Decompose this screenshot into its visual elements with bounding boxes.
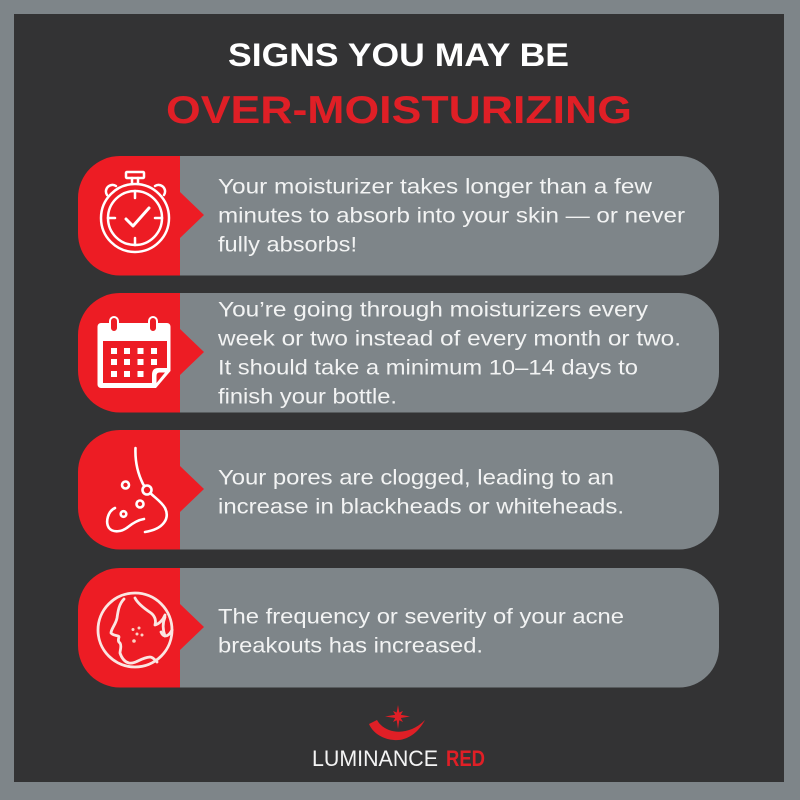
icon: face with acne (98, 593, 172, 667)
title (166, 37, 632, 132)
text: fast use: It should take a minimum 10–14 days to (218, 356, 638, 380)
text: slow absorption: Your moisturizer takes longer than a few (218, 174, 653, 198)
icon: nose with pores (107, 448, 167, 532)
text: fast use: finish your bottle. (218, 384, 397, 408)
icon: stopwatch (101, 172, 169, 252)
panel: fast use (78, 293, 719, 412)
text: slow absorption (218, 174, 685, 256)
text: slow absorption: minutes to absorb into your skin — or never (218, 204, 685, 228)
panel: slow absorption (78, 156, 719, 276)
icon: calendar (98, 317, 170, 388)
text: fast use (217, 298, 681, 408)
text: acne breakouts: breakouts has increased. (218, 634, 483, 658)
text: clogged pores: increase in blackheads or whiteheads. (218, 494, 624, 518)
title: OVER-MOISTURIZING (166, 89, 632, 132)
logo star (385, 705, 410, 729)
text: fast use: week or two instead of every month or two. (217, 326, 681, 350)
logo wordmark: LUMINANCE (312, 746, 438, 771)
logo wordmark: RED (446, 746, 485, 771)
panel: clogged pores (78, 430, 719, 550)
text: clogged pores (218, 466, 624, 518)
text: acne breakouts: The frequency or severity of your acne (218, 604, 624, 628)
panel: acne breakouts (78, 568, 719, 688)
text: fast use: You’re going through moisturizers every (218, 298, 648, 322)
text: slow absorption: fully absorbs! (218, 232, 357, 256)
text: clogged pores: Your pores are clogged, leading to an (218, 466, 614, 490)
text: acne breakouts (218, 604, 624, 658)
logo: Luminance Red (312, 705, 485, 771)
title: SIGNS YOU MAY BE (228, 37, 569, 73)
logo crescent (369, 720, 425, 740)
